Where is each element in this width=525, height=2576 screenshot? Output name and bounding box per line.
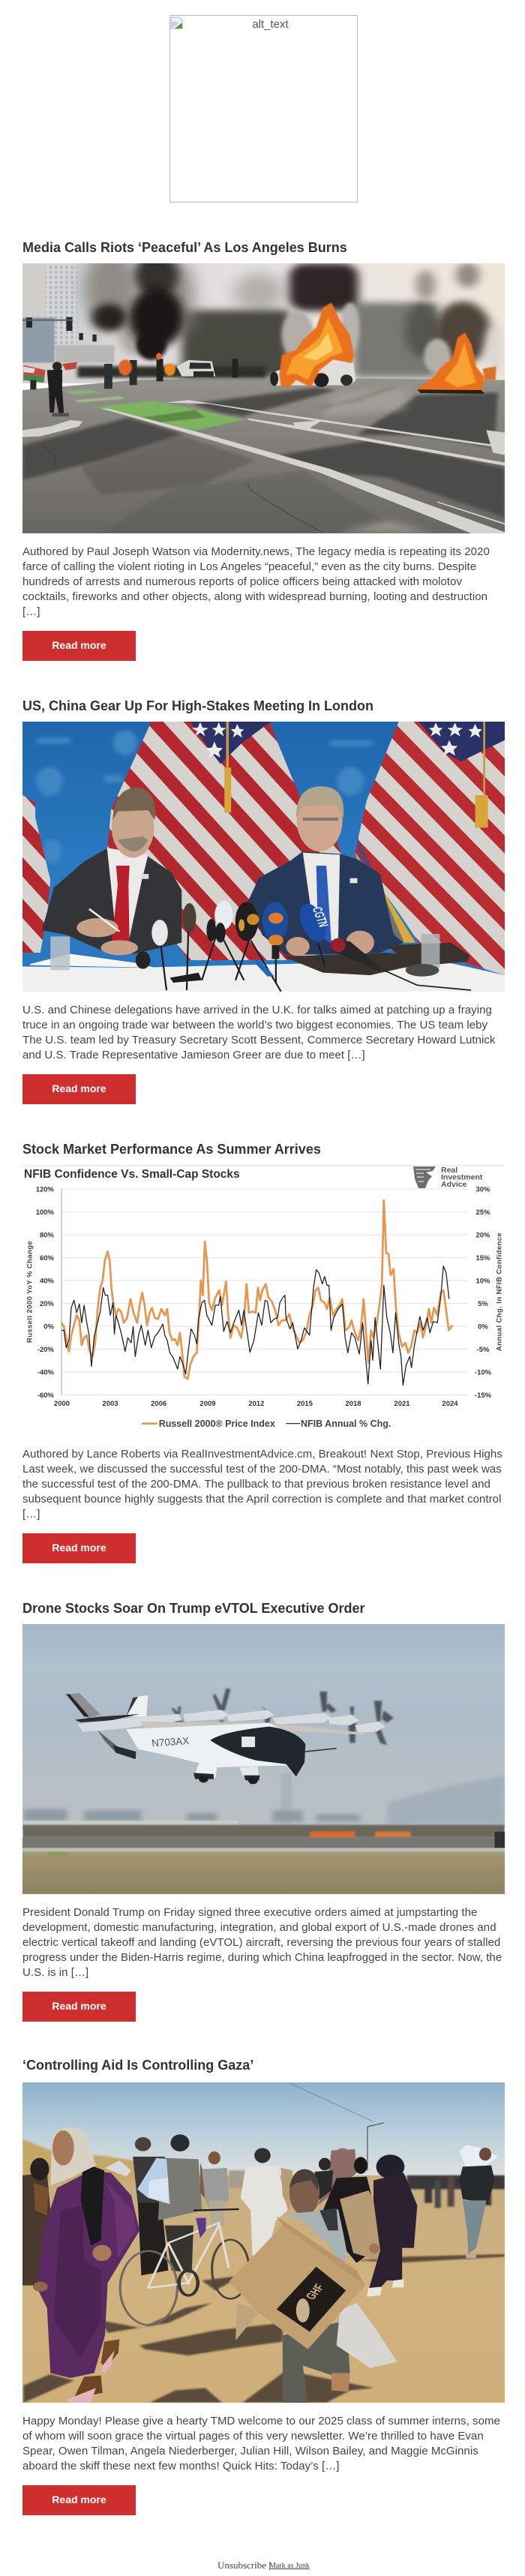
footer links — [218, 2559, 310, 2571]
left axis labels: 60% — [40, 1254, 55, 1262]
article text: […] — [22, 605, 40, 618]
x axis labels: 2012 — [248, 1400, 264, 1408]
man in grey shirt and white robe — [202, 2148, 292, 2256]
left axis labels: -40% — [38, 1368, 55, 1377]
legend: NFIB Annual % Chg. — [301, 1419, 391, 1429]
article text: aboard the skiff these next few months! Quick Hits: Today’s […] — [22, 2460, 340, 2472]
landing gear — [194, 1749, 337, 1784]
panel: article 4 drones — [22, 1601, 505, 2022]
article text: Happy Monday! Please give a hearty TMD welcome to our 2025 class of summer interns, some — [22, 2415, 500, 2427]
flag poles and tassels — [224, 722, 488, 827]
aircraft wing and booms — [78, 1710, 386, 1735]
fire right — [416, 332, 496, 394]
ground — [22, 2175, 505, 2403]
photo: burning cars on street — [22, 263, 505, 533]
x axis labels: 2015 — [297, 1400, 314, 1408]
right axis labels: 5% — [478, 1300, 488, 1308]
x axis labels: 2009 — [200, 1400, 216, 1408]
read more button — [22, 1074, 136, 1104]
left man — [42, 788, 182, 955]
article text: Spear, Owen Tilman, Angela Niederberger, Julian Hill, Wilson Bailey, and Maggie McGinnis — [22, 2445, 478, 2457]
distant hills and trees — [23, 1773, 505, 1824]
bicycle — [120, 2209, 249, 2325]
right axis title: Annual Chg. In NFIB Confidence — [495, 1232, 504, 1351]
panel: article 2 china talks — [22, 698, 505, 1104]
article text: Authored by Paul Joseph Watson via Modernity.news, The legacy media is repeating its 2020 — [22, 545, 490, 558]
right axis labels: 20% — [476, 1232, 490, 1239]
logo text: Advice — [441, 1180, 467, 1189]
footer links: Unsubscribe | — [218, 2559, 271, 2571]
article text: cocktails, fireworks and other objects, along with widespread burning, looting and destruction — [22, 590, 488, 603]
road lines — [22, 400, 505, 533]
runway and ground — [22, 1821, 505, 1894]
x axis labels: 2018 — [345, 1400, 362, 1408]
read more button — [22, 1533, 136, 1563]
broken image placeholder — [170, 15, 358, 203]
green bike lane — [64, 389, 245, 431]
purple bag on bicycle — [196, 2218, 206, 2238]
article text: electric vertical takeoff and landing (eVTOL) aircraft, reversing the previous four years of stalled — [22, 1936, 500, 1949]
article text: President Donald Trump on Friday signed three executive orders aimed at jumpstarting the — [22, 1906, 477, 1919]
logo text — [441, 1166, 483, 1189]
aircraft window — [242, 1737, 255, 1747]
right axis labels: 15% — [476, 1254, 490, 1262]
aircraft registration: N703AX — [151, 1735, 190, 1749]
read more button: Read more — [52, 639, 106, 651]
read more button — [22, 631, 136, 661]
read more button: Read more — [52, 2493, 106, 2505]
right axis labels: 10% — [476, 1277, 490, 1286]
heading: US, China Gear Up For High-Stakes Meeting In London — [22, 698, 374, 713]
article text — [22, 1906, 502, 1979]
table — [22, 943, 505, 992]
man with blue bag — [105, 2134, 224, 2275]
read more button: Read more — [52, 1542, 106, 1554]
article text: Authored by Lance Roberts via RealInvestmentAdvice.cm, Breakout! Next Stop, Previous Highs — [22, 1448, 502, 1461]
right axis labels: -10% — [475, 1368, 492, 1377]
alt text: alt_text — [252, 18, 289, 31]
police car — [177, 360, 215, 377]
chart title: NFIB Confidence Vs. Small-Cap Stocks — [24, 1168, 240, 1181]
backdrop seals — [36, 730, 372, 863]
article text: truce in an ongoing trade war between the world’s two biggest economies. The US team leby — [22, 1019, 488, 1031]
woman in purple — [33, 2127, 140, 2403]
microphones — [136, 901, 471, 992]
chart: NFIB confidence vs small caps — [22, 1165, 505, 1429]
plot lines — [22, 1165, 505, 1435]
right axis labels: -5% — [477, 1346, 490, 1354]
logo text: Real — [441, 1166, 458, 1175]
aircraft cockpit — [210, 1727, 305, 1776]
centre flag — [108, 722, 370, 960]
aircraft body — [126, 1723, 304, 1776]
panel: article 5 gaza — [22, 2058, 505, 2515]
heading: ‘Controlling Aid Is Controlling Gaza’ — [22, 2058, 254, 2073]
road — [22, 377, 505, 533]
left axis labels: 120% — [36, 1185, 55, 1194]
article text: Last week, we discussed the successful test of the 200-DMA. “Most notably, this past week was — [22, 1463, 502, 1476]
article text: progress under the Biden-Harris regime, during which China leapfrogged in the sector. Now, the — [22, 1951, 502, 1964]
left axis labels — [36, 1185, 55, 1400]
flags and protester — [23, 362, 77, 416]
crowd and traffic lights — [22, 317, 266, 389]
read more button — [22, 1992, 136, 2022]
left axis labels: 40% — [40, 1277, 55, 1286]
left sliver flag — [22, 795, 50, 953]
article text: […] — [22, 1508, 40, 1521]
photo: eVTOL aircraft — [22, 1624, 505, 1894]
logo text: Investment — [441, 1173, 483, 1182]
article text — [22, 2415, 500, 2472]
read more button: Read more — [52, 1082, 106, 1094]
icon: broken image — [171, 17, 183, 29]
fire centre — [279, 302, 354, 387]
far left people — [22, 2158, 50, 2286]
footer links: Mark as Junk — [269, 2562, 310, 2570]
heading: Drone Stocks Soar On Trump eVTOL Executive Order — [22, 1601, 364, 1616]
read more button: Read more — [52, 2000, 106, 2012]
burning car — [270, 362, 356, 387]
left axis labels: -60% — [38, 1392, 55, 1400]
x axis labels: 2006 — [151, 1400, 166, 1408]
article text: The U.S. team led by Treasury Secretary Scott Bessent, Commerce Secretary Howard Lutnick — [22, 1034, 495, 1046]
article text: U.S. is in […] — [22, 1966, 88, 1979]
right axis labels: 25% — [476, 1208, 490, 1217]
article text: development, domestic manufacturing, integration, and global export of U.S.-made drones and — [22, 1921, 496, 1934]
sky — [22, 2082, 505, 2178]
girl with GHF box: GHF — [304, 2282, 328, 2302]
legend — [159, 1419, 391, 1429]
article text: hundreds of arrests and numerous reports of police officers being attacked with molotov — [22, 575, 462, 588]
right axis labels — [475, 1185, 492, 1400]
x axis labels — [54, 1400, 458, 1408]
panel: article 3 stock market — [22, 1142, 505, 1563]
small fires left — [118, 353, 176, 376]
right axis labels: -15% — [475, 1392, 492, 1400]
photo: aid recipients in Gaza — [22, 2082, 505, 2403]
article text: subsequent bounce highly suggests that the April correction is complete and that market control — [22, 1493, 501, 1506]
smoke plume left — [84, 250, 194, 360]
photo: press conference — [22, 722, 505, 992]
road cracks — [42, 445, 323, 533]
article text: of whom will soon grace the virtual pages of this very newsletter. We’re thrilled to have Evan — [22, 2430, 484, 2442]
read more button — [22, 2485, 136, 2515]
article text: and U.S. Trade Representative Jamieson Greer are due to meet […] — [22, 1049, 365, 1061]
left axis labels: 20% — [40, 1300, 55, 1308]
right axis labels: 0% — [478, 1323, 488, 1331]
water glasses — [50, 934, 440, 970]
hill — [22, 2139, 141, 2181]
woman in scarf with cardboard — [318, 2148, 390, 2263]
right man — [248, 786, 404, 956]
left axis labels: -20% — [38, 1346, 55, 1354]
aircraft tail — [65, 1693, 148, 1759]
smoke plume centre — [282, 263, 359, 359]
girl with GHF box — [229, 2169, 397, 2403]
sky — [22, 1624, 505, 1829]
heading: Stock Market Performance As Summer Arrives — [22, 1142, 321, 1157]
article text — [22, 1004, 495, 1061]
x axis labels: 2021 — [394, 1400, 410, 1408]
trees and haze — [182, 272, 440, 377]
shadows on ground — [23, 2254, 505, 2403]
right flag — [355, 722, 505, 975]
x axis labels: 2024 — [442, 1400, 458, 1408]
right axis labels: 30% — [476, 1185, 490, 1194]
article text: the successful test of the 200-DMA. The pullback to that previous broken resistance level and — [22, 1478, 490, 1491]
distant crowd — [229, 2170, 505, 2208]
icon: eagle logo — [413, 1166, 436, 1188]
x axis labels: 2003 — [102, 1400, 118, 1408]
propellers — [172, 1689, 394, 1746]
article text: U.S. and Chinese delegations have arrived in the U.K. for talks aimed at patching up a fraying — [22, 1004, 492, 1016]
heading: Media Calls Riots ‘Peaceful’ As Los Angeles Burns — [22, 240, 347, 255]
article text — [22, 1448, 502, 1521]
left axis labels: 80% — [40, 1232, 55, 1239]
panel: article 1 riots — [22, 240, 505, 661]
left axis labels: 0% — [44, 1323, 55, 1331]
left axis title: Russell 2000 YoY % Change — [26, 1241, 34, 1343]
man carrying sack — [459, 2145, 498, 2258]
yellow flag fringe — [355, 853, 416, 943]
smoke plume right — [416, 263, 505, 375]
microphones: CGTN — [309, 906, 331, 929]
buildings — [22, 263, 114, 362]
blue backdrop — [22, 722, 505, 992]
road shadows — [22, 385, 505, 533]
left axis labels: 100% — [36, 1208, 55, 1217]
light road patches — [320, 388, 434, 533]
x axis labels: 2000 — [54, 1400, 70, 1408]
navy cantons and stars — [190, 722, 505, 764]
legend: Russell 2000® Price Index — [159, 1419, 275, 1429]
sky — [22, 263, 505, 383]
power line and pole — [290, 2083, 383, 2170]
woman in black veil — [314, 2154, 417, 2297]
article text: farce of calling the violent rioting in Los Angeles “peaceful,” even as the city burns. Despite — [22, 560, 476, 573]
article text — [22, 545, 490, 618]
